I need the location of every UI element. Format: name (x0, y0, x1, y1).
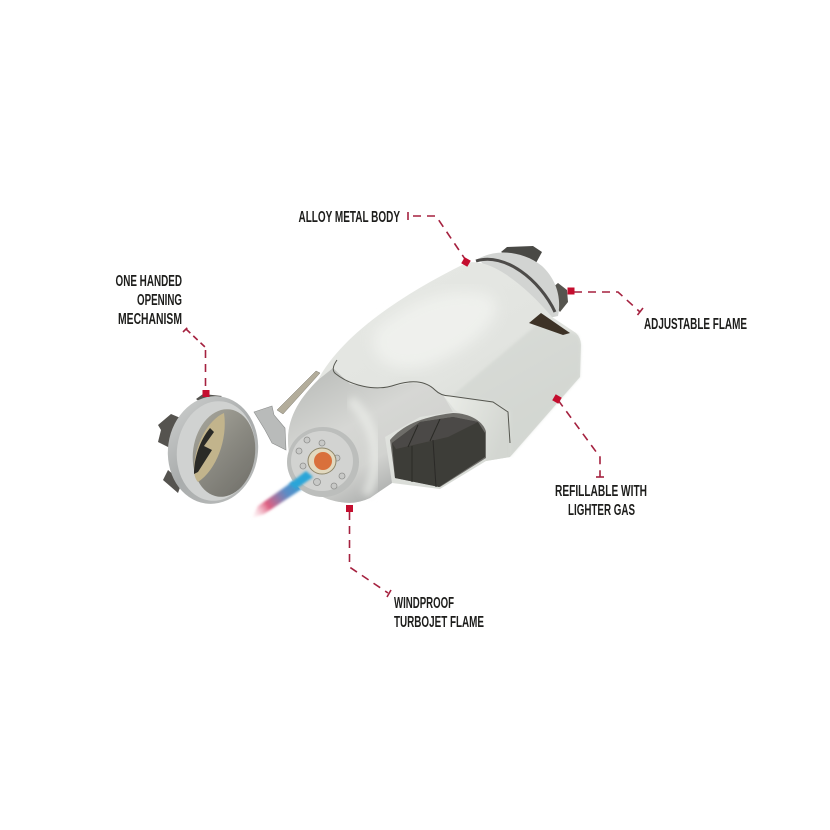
nose light band (350, 400, 375, 495)
panel seam (333, 360, 510, 443)
leader line (574, 292, 640, 312)
ignition button (390, 413, 486, 487)
callout: one handed opening mechanism (116, 273, 210, 397)
flame core (289, 471, 313, 489)
label text: ADJUSTABLE FLAME (644, 316, 747, 333)
label text: REFILLABLE WITH (555, 483, 647, 500)
callout: adjustable flame (568, 288, 747, 333)
cap hinge (254, 406, 286, 450)
marker (552, 394, 562, 404)
front nose shell (288, 368, 453, 503)
label text (394, 595, 484, 631)
label text (116, 273, 182, 328)
vent slot (529, 313, 570, 335)
marker (568, 288, 574, 294)
callout: alloy metal body (298, 209, 471, 267)
label text: ONE HANDED (116, 273, 182, 290)
callout: windproof turbojet flame (346, 505, 484, 631)
button top and front (392, 417, 485, 487)
spark wheel rod (277, 371, 320, 414)
label text: OPENING (137, 292, 182, 309)
neck collar and grips (476, 246, 568, 320)
gasket band (476, 259, 555, 312)
label text: MECHANISM (118, 311, 182, 328)
label text: LIGHTER GAS (568, 502, 635, 519)
top grip (501, 246, 542, 263)
cap interior (187, 405, 261, 501)
burner face (287, 427, 359, 497)
air holes (296, 437, 345, 489)
button opening (390, 413, 486, 487)
marker (202, 390, 210, 397)
label text: TURBOJET FLAME (394, 614, 484, 631)
body highlight (373, 292, 496, 369)
flame (252, 472, 314, 518)
label text: WINDPROOF (394, 595, 454, 612)
marker (346, 505, 353, 512)
label text: ALLOY METAL BODY (298, 209, 400, 226)
leader line (183, 326, 205, 347)
lighter body (288, 262, 581, 503)
collar (478, 253, 559, 320)
marker (461, 257, 471, 267)
brass insert (194, 413, 225, 482)
callout: refillable with lighter gas (552, 394, 647, 519)
burner ring (308, 448, 336, 474)
leader line (558, 400, 600, 477)
cap grip tabs (158, 394, 222, 493)
flip cap (158, 390, 286, 510)
lighter photo illustration (158, 246, 581, 518)
face outer disc (287, 427, 359, 497)
label text (555, 483, 647, 519)
leader line (407, 212, 409, 220)
burner nozzle (314, 452, 332, 470)
leader line (350, 512, 388, 593)
rear panel shade (452, 322, 581, 457)
cap outer ring (161, 390, 265, 510)
lower body panel (443, 395, 510, 461)
right grip (552, 283, 568, 312)
dark insert mark (194, 428, 214, 474)
